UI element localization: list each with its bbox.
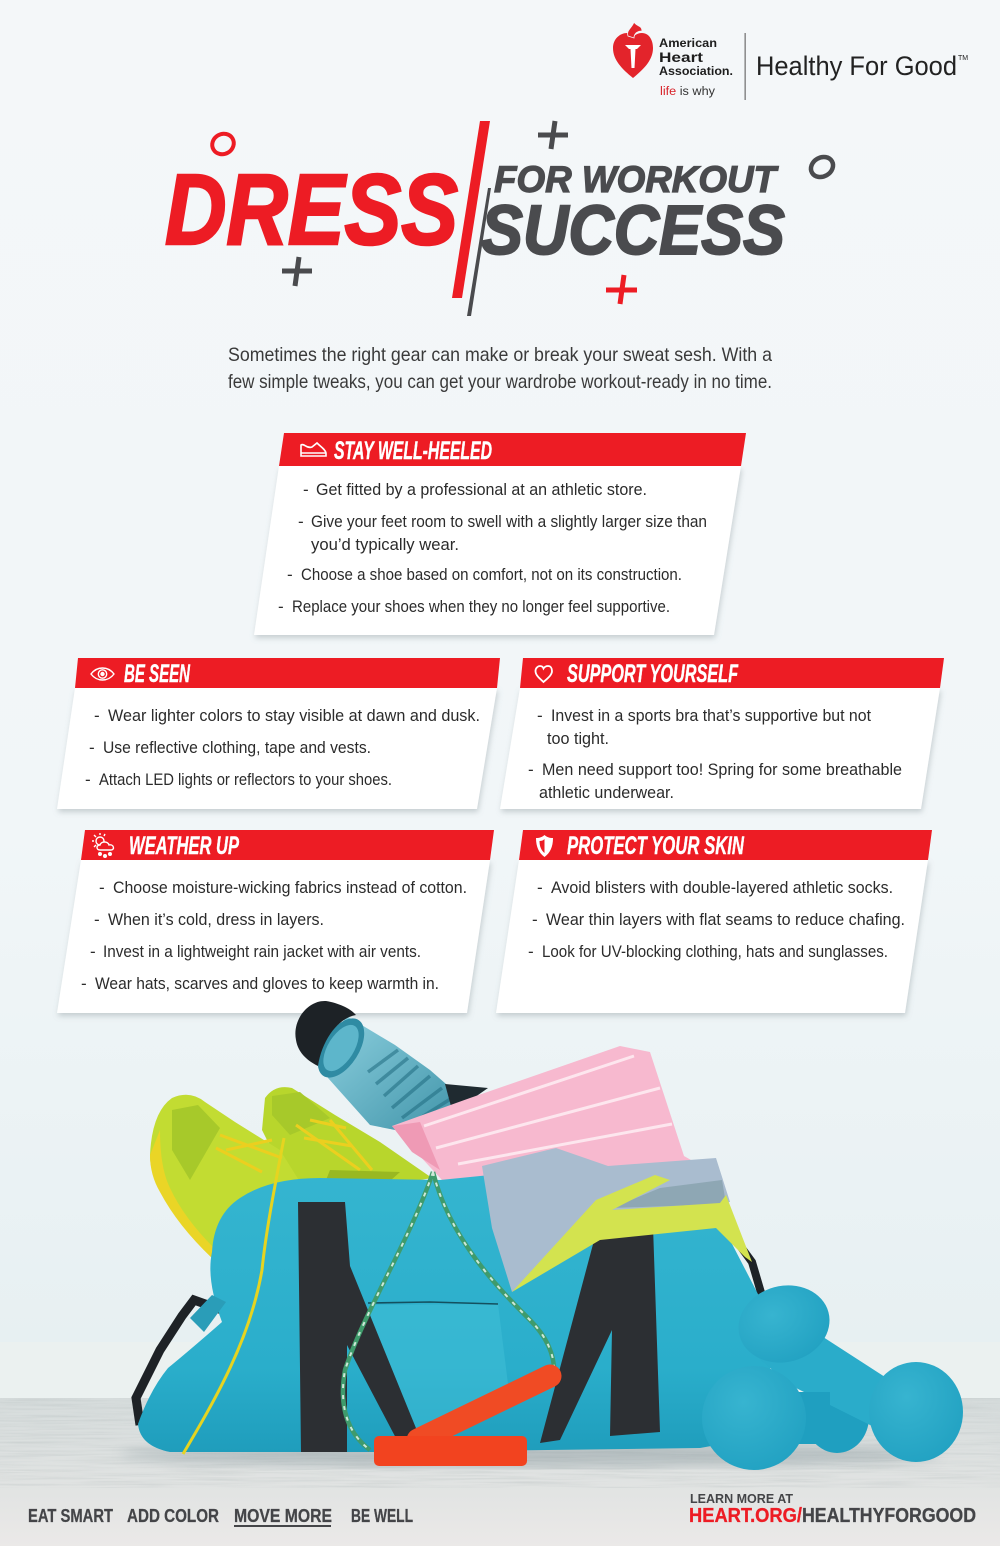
tips list: -: [528, 942, 534, 961]
tips list: -: [90, 942, 96, 961]
tips list: -: [278, 597, 284, 616]
tips list: -: [89, 738, 95, 757]
footer nav: [28, 1506, 413, 1527]
sneakers: [150, 1087, 432, 1258]
heading: STAY WELL-HEELED: [334, 437, 492, 465]
panel: weather up: [57, 830, 494, 1013]
logo wordmark: American: [659, 38, 717, 50]
footer nav: MOVE MORE: [234, 1506, 332, 1526]
tips list: -: [298, 512, 304, 531]
tips list: Wear lighter colors to stay visible at dawn and dusk.: [108, 706, 480, 725]
floor wood grain: [0, 1398, 1000, 1488]
logo: American Heart Association: [613, 22, 733, 98]
footer nav: BE WELL: [351, 1506, 413, 1526]
card body: [57, 688, 497, 809]
decorative ring: gray: [807, 153, 837, 181]
tips list: -: [81, 974, 87, 993]
water bottle: [295, 1001, 488, 1130]
card header: [279, 433, 746, 466]
tips list: -: [532, 910, 538, 929]
tips list: [278, 480, 707, 616]
green jump rope: [343, 1172, 554, 1450]
icon: heart: [536, 666, 552, 682]
card body: [57, 860, 490, 1013]
panel: stay well-heeled: [254, 433, 746, 635]
footer link: [689, 1492, 976, 1527]
tips list: Get fitted by a professional at an athletic store.: [316, 480, 647, 499]
tips list: Choose a shoe based on comfort, not on its construction.: [301, 565, 682, 584]
logo wordmark: life is why: [660, 86, 715, 98]
tips list: Attach LED lights or reflectors to your shoes.: [99, 770, 392, 789]
tips list: Wear thin layers with flat seams to reduce chafing.: [546, 910, 905, 929]
title words: FOR WORKOUT: FOR WORKOUT: [494, 159, 779, 200]
tips list: athletic underwear.: [539, 783, 674, 802]
lime lining: [512, 1175, 752, 1292]
panel: protect your skin: [496, 830, 932, 1013]
gray shirt: [482, 1148, 730, 1292]
intro text: few simple tweaks, you can get your wardrobe workout-ready in no time.: [228, 371, 772, 393]
decorative plus: gray left: [282, 257, 312, 286]
footer link: HEALTHYFORGOOD: [802, 1505, 976, 1527]
footer nav: ADD COLOR: [127, 1506, 219, 1526]
dumbbell: front: [702, 1366, 830, 1470]
tips list: Men need support too! Spring for some breathable: [542, 760, 902, 779]
tips list: -: [94, 910, 100, 929]
card header: [75, 658, 500, 688]
bag black side strap: [136, 1300, 222, 1425]
footer link: HEART.ORG/: [689, 1505, 802, 1527]
trademark: TM: [958, 55, 968, 62]
decorative ring: red: [208, 130, 238, 158]
icon: eye: [91, 668, 114, 680]
dumbbell: back: [730, 1275, 963, 1462]
bag clip: [190, 1295, 226, 1332]
card header: [81, 830, 494, 860]
tips list: Choose moisture-wicking fabrics instead of cotton.: [113, 878, 467, 897]
title word: DRESS: DRESS: [165, 154, 458, 266]
floor: [0, 1398, 1000, 1546]
card header: [520, 658, 944, 688]
tips list: Avoid blisters with double-layered athletic socks.: [551, 878, 893, 897]
panel: support yourself: [500, 658, 944, 809]
jump rope handle: horizontal: [374, 1436, 527, 1466]
tips list: Wear hats, scarves and gloves to keep warmth in.: [95, 974, 439, 993]
tips list: [528, 878, 905, 961]
icon: sun and rain cloud: [92, 833, 113, 857]
tips list: Look for UV-blocking clothing, hats and sunglasses.: [542, 942, 888, 961]
floor shadow: [120, 1443, 940, 1467]
tips list: Invest in a lightweight rain jacket with air vents.: [103, 942, 421, 961]
tips list: -: [537, 706, 543, 725]
tips list: -: [99, 878, 105, 897]
tips list: too tight.: [547, 729, 609, 748]
tips list: -: [287, 565, 293, 584]
logo wordmark: Heart: [659, 49, 703, 65]
intro text: Sometimes the right gear can make or break your sweat sesh. With a: [228, 344, 772, 366]
icon: shield: [536, 835, 553, 857]
tips list: Replace your shoes when they no longer feel supportive.: [292, 597, 670, 616]
footer nav: EAT SMART: [28, 1506, 113, 1526]
card header: [519, 830, 932, 860]
footer link: LEARN MORE AT: [690, 1492, 793, 1506]
heading: SUPPORT YOURSELF: [567, 660, 738, 688]
card body: [254, 466, 741, 635]
title: [165, 121, 785, 316]
decorative plus: red: [606, 275, 637, 304]
icon: heart and torch: [613, 22, 653, 78]
illustration: gym bag with gear: [120, 1001, 963, 1470]
bag handle: left: [298, 1202, 420, 1452]
tips list: [528, 706, 902, 802]
jump rope handle: diagonal: [418, 1376, 550, 1440]
heading: BE SEEN: [124, 660, 191, 688]
bag right black strap: [730, 1232, 762, 1296]
heading: WEATHER UP: [129, 832, 239, 860]
decorative plus: gray top: [538, 121, 568, 149]
gray slash: [467, 188, 491, 316]
intro text: [228, 344, 772, 393]
tips list: Use reflective clothing, tape and vests.: [103, 738, 371, 757]
card body: [500, 688, 940, 809]
bag pocket seam: [368, 1302, 498, 1304]
tips list: -: [303, 480, 309, 499]
icon: shoe: [301, 443, 326, 456]
baseboard: [0, 1342, 1000, 1398]
logo: Healthy For Good: Healthy For Good: [756, 51, 957, 81]
panel: be seen: [57, 658, 500, 809]
tips list: When it’s cold, dress in layers.: [108, 910, 324, 929]
tips list: Invest in a sports bra that’s supportive but not: [551, 706, 871, 725]
shirt inner shadow: [612, 1180, 726, 1208]
bag body: [138, 1170, 772, 1452]
tips list: -: [537, 878, 543, 897]
yellow shoelace: [183, 1138, 284, 1454]
card body: [496, 860, 928, 1013]
bag handle: right: [540, 1226, 660, 1443]
bag highlight: [370, 1304, 510, 1440]
title word: SUCCESS: SUCCESS: [481, 191, 785, 269]
tips list: -: [85, 770, 91, 789]
tips list: -: [94, 706, 100, 725]
logo wordmark: [659, 38, 733, 98]
heading: PROTECT YOUR SKIN: [567, 832, 745, 860]
tips list: [85, 706, 480, 789]
red slash: [452, 121, 490, 298]
pink towel: [392, 1046, 712, 1200]
logo wordmark: Association.: [659, 66, 733, 78]
tips list: -: [528, 760, 534, 779]
tips list: Give your feet room to swell with a slightly larger size than: [311, 512, 707, 531]
tips list: [81, 878, 467, 993]
logo divider: [744, 33, 746, 100]
tips list: you’d typically wear.: [311, 535, 459, 554]
